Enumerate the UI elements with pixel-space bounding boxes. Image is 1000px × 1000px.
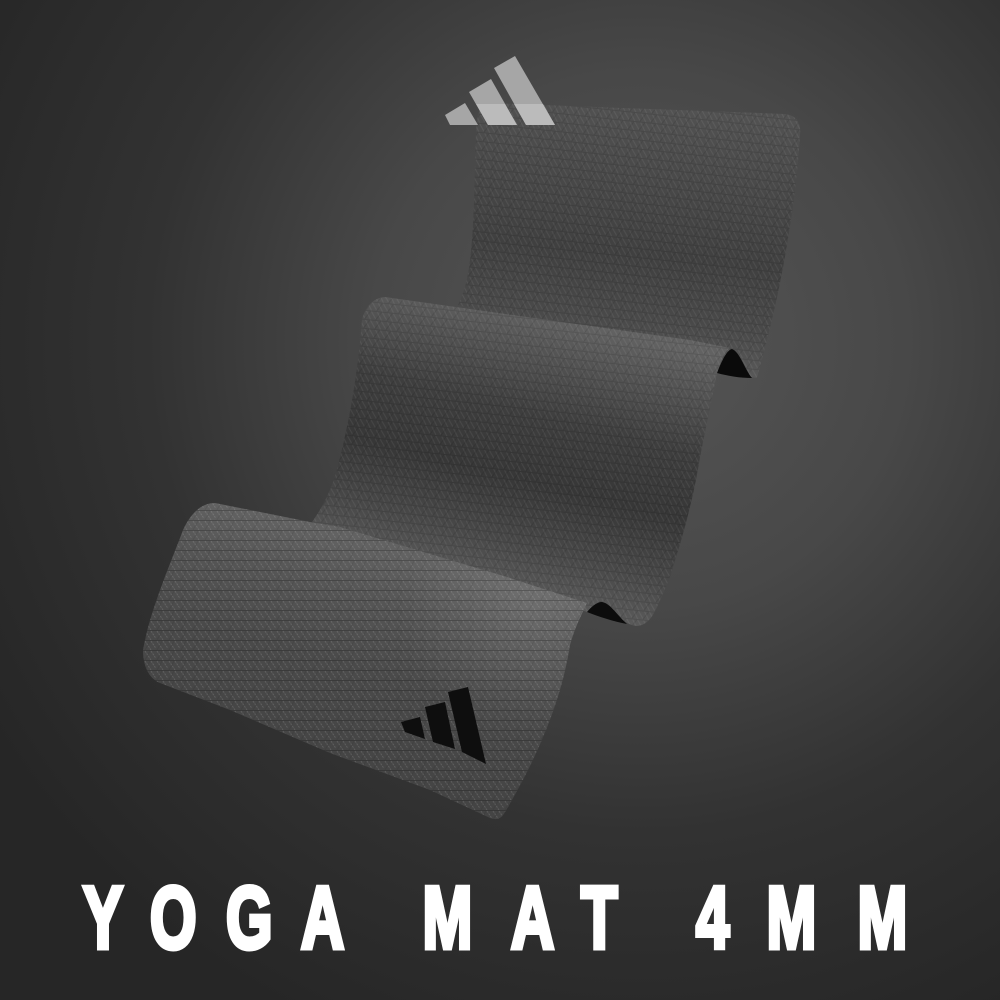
mat: back panel [458,103,800,378]
icon: logo printed on mat [401,687,486,764]
yoga mat [143,103,800,819]
mat: front panel [143,503,587,819]
mat: middle panel [312,297,730,626]
title: YOGA MAT 4MM [83,868,907,967]
mat: lower fold underside [587,602,627,624]
icon: brand logo [445,56,555,125]
mat: upper fold underside [717,349,752,378]
